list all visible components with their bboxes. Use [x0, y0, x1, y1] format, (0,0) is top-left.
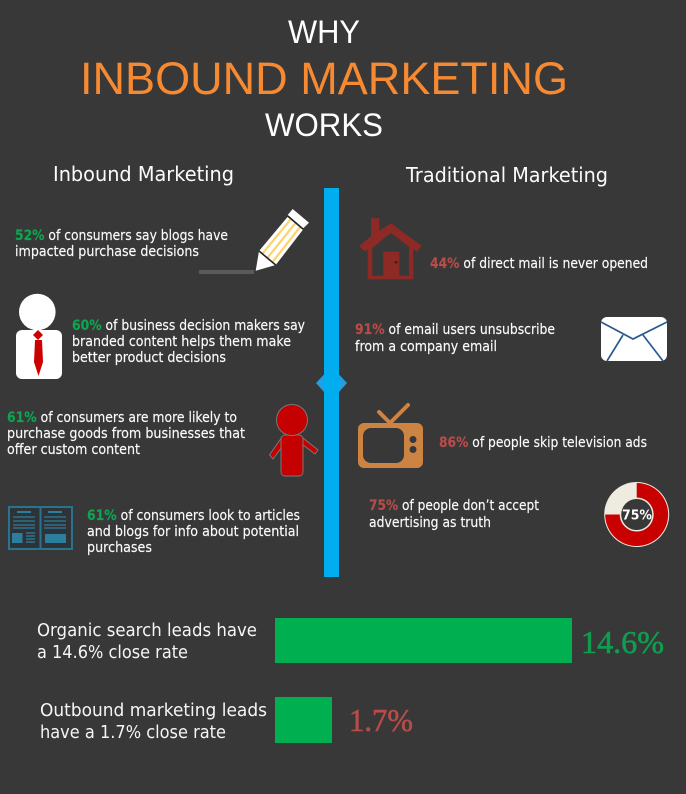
text: outbound marketing: Outbound marketing leads: [40, 701, 267, 721]
bar: 1.7%: [275, 697, 332, 743]
title: WHY: [288, 14, 360, 50]
icon: open book: [9, 507, 72, 549]
heading: Traditional Marketing: Traditional Marketing: [405, 163, 608, 187]
text: 61% custom content: purchase goods from businesses that: [7, 426, 245, 442]
center divider: [316, 188, 347, 577]
text: 44% direct mail: 44% of direct mail is never opened: [430, 256, 648, 272]
text: 86% television: 86% of people skip television ads: [439, 435, 647, 451]
text: 61% custom content: 61% of consumers are more likely to: [7, 410, 237, 426]
text: 61% articles and blogs: [87, 508, 300, 556]
text: organic search: a 14.6% close rate: [37, 643, 188, 663]
icon: envelope: [601, 317, 667, 361]
donut chart: 75%: 75%: [622, 508, 652, 524]
bar: 14.6%: [275, 618, 572, 663]
icon: businessman: [16, 294, 62, 379]
text: 61% custom content: [7, 410, 245, 458]
text: 91% email: 91% of email users unsubscribe: [355, 322, 555, 338]
title: [80, 14, 568, 143]
text: 61% articles and blogs: purchases: [87, 540, 152, 556]
text: 61% articles and blogs: 61% of consumers look to articles: [87, 508, 300, 524]
text: 52% blogs: impacted purchase decisions: [15, 244, 199, 260]
text: 91% email: from a company email: [355, 339, 497, 355]
text: organic search: [37, 621, 257, 663]
value: 1.7%: 1.7%: [349, 702, 413, 738]
text: outbound marketing: have a 1.7% close rate: [40, 723, 226, 743]
text: 52% blogs: 52% of consumers say blogs have: [15, 228, 228, 244]
text: 75% advertising: 75% of people don’t accept: [369, 498, 539, 514]
heading: Inbound Marketing: Inbound Marketing: [53, 162, 234, 186]
text: organic search: Organic search leads have: [37, 621, 257, 641]
text: 75% advertising: advertising as truth: [369, 515, 491, 531]
icon: pencil: [199, 209, 309, 274]
text: 52% blogs: [15, 228, 228, 260]
title: WORKS: [265, 107, 383, 143]
value: 14.6%: 14.6%: [581, 624, 664, 660]
text: 91% email: [355, 322, 555, 355]
text: 61% custom content: offer custom content: [7, 442, 140, 458]
icon: house: [359, 218, 422, 279]
text: 60% branded content: 60% of business decision makers say: [72, 318, 305, 334]
text: 75% advertising: [369, 498, 539, 531]
icon: television: [358, 405, 423, 468]
donut chart: 75%: [604, 482, 669, 547]
text: outbound marketing: [40, 701, 267, 743]
icon: red person: [270, 404, 318, 476]
text: 61% articles and blogs: and blogs for info about potential: [87, 524, 299, 540]
title: INBOUND MARKETING: [80, 53, 568, 104]
text: 60% branded content: better product decisions: [72, 350, 226, 366]
text: 60% branded content: [72, 318, 305, 366]
text: 60% branded content: branded content helps them make: [72, 334, 291, 350]
